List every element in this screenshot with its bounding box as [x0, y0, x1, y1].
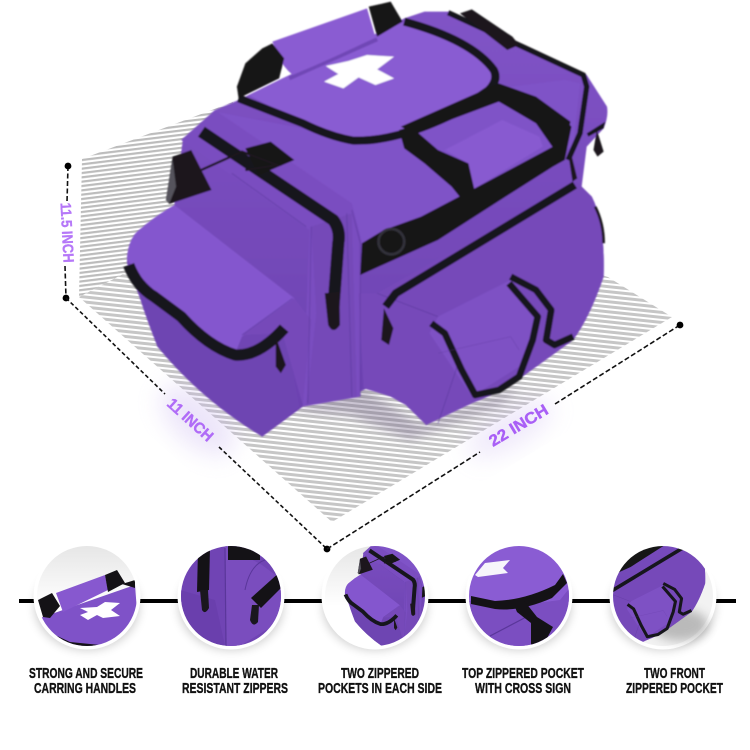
feature 3: side pockets: TWO ZIPPERED [341, 665, 419, 682]
feature 5: front pockets [606, 546, 724, 694]
feature 1: carrying handles: STRONG AND SECURE [29, 665, 143, 682]
dimension depth: 11 inch: 11 INCH [163, 395, 216, 445]
back wall hatch [79, 102, 240, 297]
feature 3: side pockets [318, 546, 442, 694]
feature 5: front pockets: TWO FRONT [644, 665, 705, 682]
feature 4: top pocket with cross: TOP ZIPPERED POCKET [462, 665, 584, 682]
dimension depth: 11 inch [66, 298, 330, 552]
main photo: purple bag [127, 2, 607, 437]
floor hatch [79, 160, 672, 522]
dimension height: 11.5 inch [57, 163, 77, 301]
purple glow near 11 inch label [148, 372, 248, 468]
feature 2: zippers: RESISTANT ZIPPERS [182, 680, 288, 697]
feature timeline line [19, 599, 736, 603]
feature 4: top pocket with cross: WITH CROSS SIGN [475, 680, 571, 697]
feature 2: zippers [178, 542, 288, 697]
dimension width: 22 inch: 22 INCH [486, 402, 552, 450]
feature 1: carrying handles: CARRING HANDLES [34, 680, 136, 697]
bag contact shadow [290, 385, 520, 440]
dimension width: 22 inch [327, 322, 683, 549]
feature 2: zippers: DURABLE WATER [190, 665, 278, 682]
dimension height: 11.5 inch: 11.5 INCH [57, 202, 77, 263]
feature 1: carrying handles [29, 542, 143, 697]
feature 4: top pocket with cross [462, 542, 584, 697]
feature 3: side pockets: POCKETS IN EACH SIDE [318, 680, 442, 697]
purple glow near 22 inch label [460, 388, 560, 468]
